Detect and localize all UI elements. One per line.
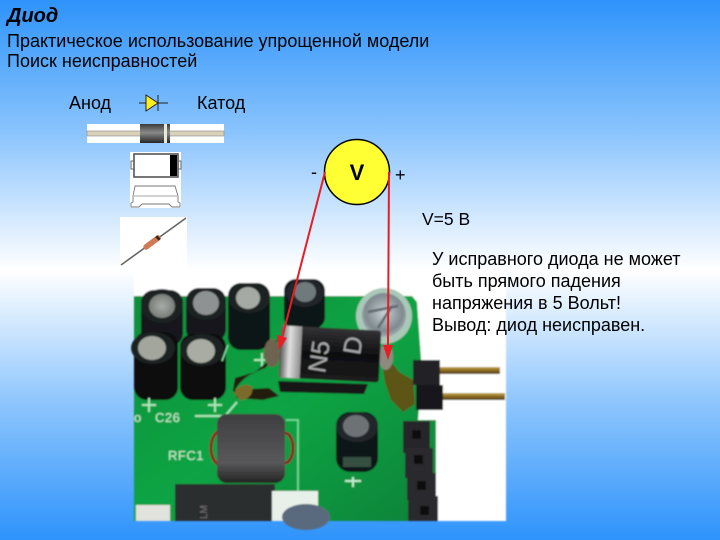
- screen print labels: o: [134, 410, 141, 425]
- anode label: Анод: [69, 93, 112, 113]
- plus sign: +: [395, 165, 406, 185]
- conclusion text: [432, 249, 680, 335]
- screen print labels: C26: [155, 410, 180, 425]
- icon: diode symbol: [139, 95, 168, 111]
- chip: LM: [199, 505, 210, 519]
- cathode label: Катод: [197, 93, 246, 113]
- conclusion text: напряжения в 5 Вольт!: [432, 293, 621, 313]
- subtitle text: Поиск неисправностей: [7, 51, 197, 71]
- voltage label: V=5 В: [422, 209, 470, 229]
- pin header: [413, 360, 505, 410]
- mounting screw: [356, 288, 412, 344]
- subtitle text: Практическое использование упрощенной модели: [7, 31, 429, 51]
- screen print labels: [134, 410, 204, 463]
- large diode: [279, 325, 381, 383]
- capacitor group, upper left: [131, 279, 325, 400]
- icon: SMD diode drawing: [130, 152, 181, 208]
- conclusion text: У исправного диода не может: [432, 249, 680, 269]
- light screen print: [142, 353, 270, 416]
- large diode: D: [338, 334, 369, 357]
- voltmeter: V: [350, 160, 365, 185]
- subtitle text: [7, 31, 429, 71]
- lower capacitor: [336, 412, 378, 487]
- conclusion text: Вывод: диод неисправен.: [432, 315, 645, 335]
- icon: glass diode photo: [120, 217, 187, 270]
- screen print labels: RFC1: [168, 448, 204, 463]
- minus sign: -: [311, 162, 317, 182]
- conclusion text: быть прямого падения: [432, 271, 621, 291]
- icon: axial diode: [87, 124, 224, 143]
- connector strip: [403, 421, 438, 521]
- large diode: N5: [303, 339, 336, 375]
- arrow: positive probe: [383, 172, 393, 360]
- circuit board photo: [131, 270, 506, 530]
- arrow: negative probe: [277, 172, 325, 350]
- green board: [134, 296, 436, 521]
- voltmeter: [324, 140, 390, 204]
- chip: [136, 484, 330, 530]
- solder joints: [233, 340, 279, 400]
- inductor: [211, 414, 293, 483]
- title: Диод: [5, 5, 58, 27]
